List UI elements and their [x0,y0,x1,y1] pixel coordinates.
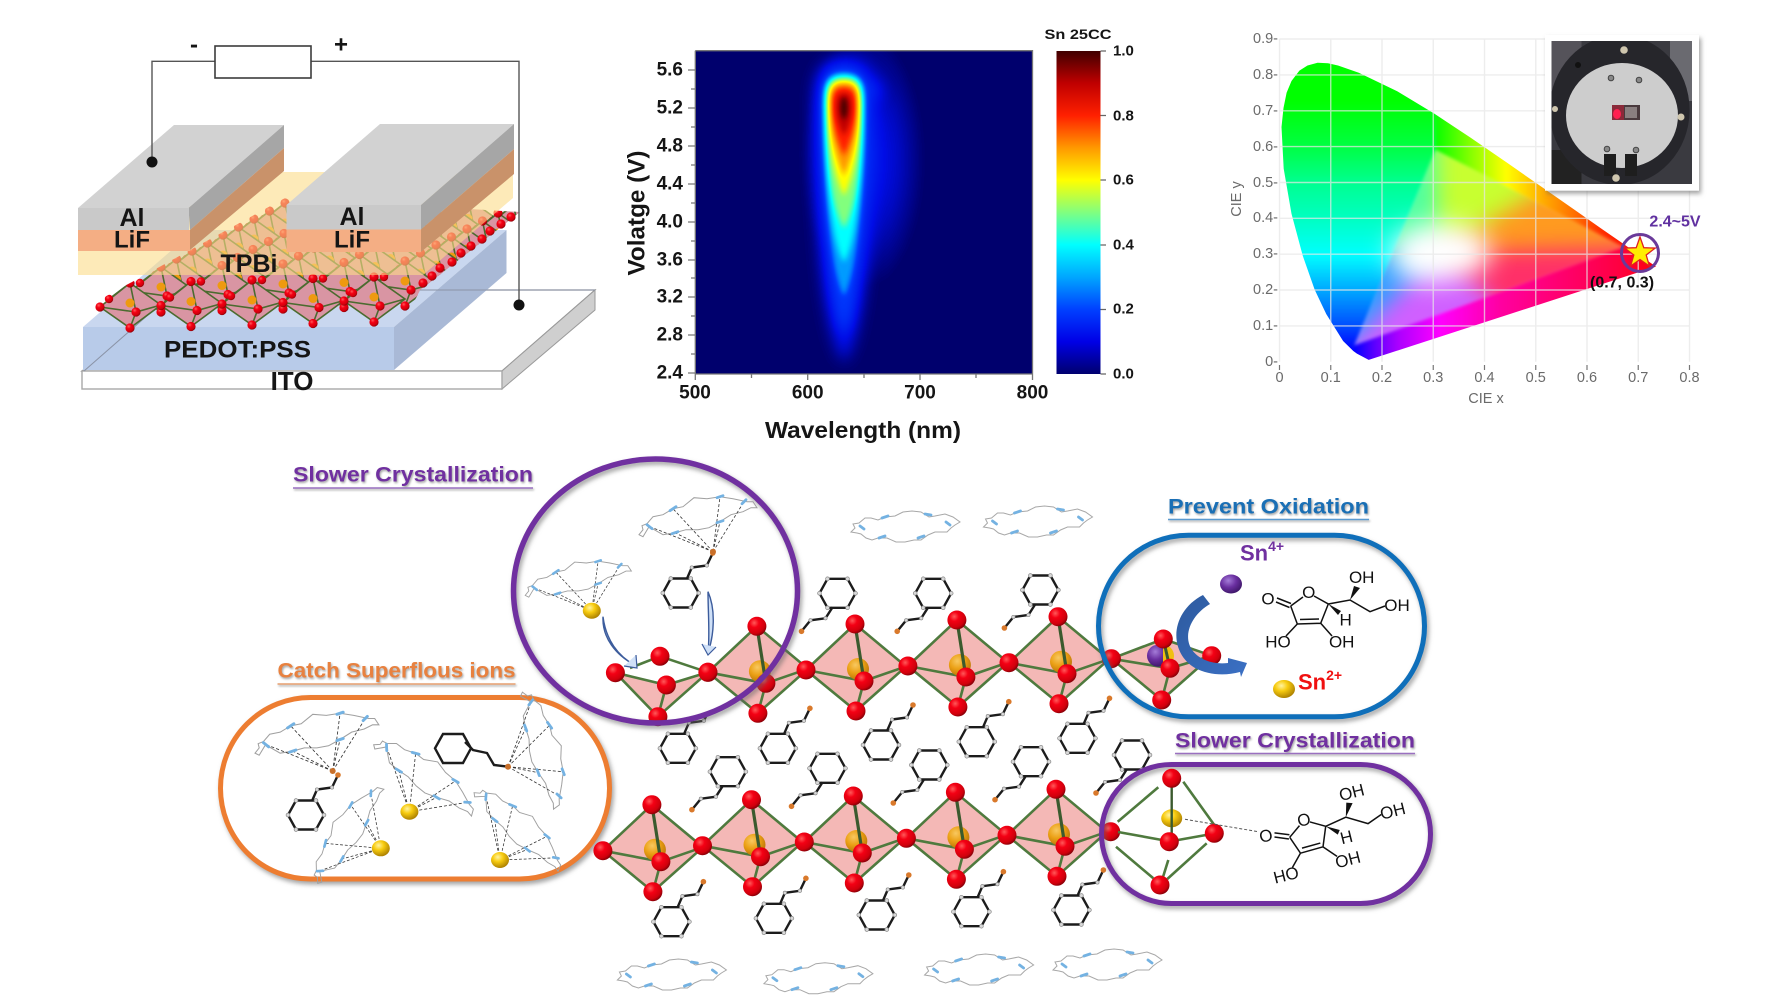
big purple circle outline [514,459,798,723]
voltage axis labels: 4.0 [657,212,683,232]
colour scale: 0.8 [1113,108,1134,124]
layer labels: LiF [334,226,370,254]
blue pill outline [1098,535,1424,717]
plot frame and ticks [688,51,1032,380]
x tick labels: 0.6 [1577,370,1597,386]
orange pill outline [220,698,610,879]
layer labels: ITO [271,366,313,396]
y tick labels: 0.8- [1253,67,1278,83]
voltage axis labels: 2.8 [657,324,683,346]
colour scale: 0.2 [1113,300,1134,318]
right Al and LiF electrode [286,124,514,252]
heading: prevent oxidation: Prevent Oxidation [1168,496,1369,518]
chart: EL intensity heatmap [624,26,1135,443]
ascorbic acid molecule bound: OH [1378,799,1407,824]
colour scale: 0.4 [1113,236,1135,254]
phenethylammonium cations [652,574,1152,938]
voltage axis labels: 5.2 [657,98,683,118]
ascorbic acid molecule bound: OH [1337,780,1366,805]
y tick labels: 0.9- [1253,31,1278,47]
colour scale: Sn 25CC [1044,26,1112,42]
ascorbic acid molecule bound [1252,772,1416,889]
perovskite chain bottom [593,780,1120,901]
purple pill white backdrop [1102,764,1430,904]
layer labels: PEDOT:PSS [164,336,311,364]
y axis title: Volatge (V) [624,151,650,275]
colour scale: 0.6 [1113,172,1134,188]
y tick labels: 0.1- [1253,318,1278,334]
x tick labels: 0.1 [1321,370,1341,386]
x tick labels: 0 [1275,370,1284,386]
chain unit at oxidation site [1102,630,1221,710]
x tick labels: 0.8 [1679,370,1700,386]
panel: catch superfluous ions [220,691,610,895]
perovskite chain top [606,607,1221,726]
Sn2+ ion [1273,680,1295,698]
voltage axis labels [657,60,683,384]
chart: CIE chromaticity diagram [1229,30,1701,407]
colour scale [1044,26,1135,382]
x tick marks [1280,365,1690,370]
Sn4+ label: Sn [1240,540,1268,566]
layer labels [114,203,370,396]
panel: device schematic [78,32,595,396]
CIE coordinate marker star [1622,234,1658,272]
ascorbic acid molecule: H [1340,610,1352,630]
y tick labels [1253,31,1278,370]
circuit wiring and resistor [146,32,524,310]
layer labels: Al [340,203,364,231]
voltage axis labels: 3.2 [657,286,683,308]
ascorbic acid molecule bound: OH [1333,848,1363,872]
ascorbic acid molecule [1261,568,1410,652]
Sn4+ ion [1220,574,1242,594]
voltage axis labels: 3.6 [657,250,683,270]
ascorbic acid molecule: O [1261,590,1275,608]
ascorbic acid molecule: OH [1384,596,1410,615]
ascorbic acid molecule bound: HO [1271,863,1301,888]
heading: slower crystallization top: Slower Crystallization [293,464,533,486]
inset photo of device [1545,35,1699,191]
ascorbic acid molecule: O [1302,583,1315,602]
purple pill outline [1102,764,1430,904]
colour scale: 1.0 [1113,42,1134,60]
colour horseshoe [1282,62,1656,360]
panel: prevent oxidation [1098,535,1424,717]
ascorbic acid molecule bound: H [1338,827,1355,848]
Sn2+ label: Sn [1298,670,1326,694]
wavelength axis labels [679,382,1048,404]
Sn2+ label: 2+ [1326,667,1342,683]
voltage axis labels: 4.4 [657,174,683,194]
x tick labels: 0.7 [1628,370,1648,386]
colour scale: 0.0 [1113,366,1134,382]
x tick labels: 0.4 [1474,370,1495,386]
curved reduction arrow [1176,595,1247,677]
left Al and LiF electrode [78,125,284,251]
Sn4+ label: 4+ [1268,538,1284,554]
x tick labels [1275,370,1700,386]
layer labels: TPBi [221,250,277,278]
circuit wiring and resistor: + [334,32,348,58]
y tick labels: 0.6- [1253,139,1278,155]
grid lines [1280,39,1690,362]
voltage axis labels: 5.6 [657,60,683,80]
wavelength axis labels: 600 [792,382,824,404]
y tick labels: 0.5- [1253,175,1278,191]
heading: slower crystallization right: Slower Crystallization [1175,730,1415,752]
ITO substrate [82,290,595,389]
y tick labels: 0- [1265,354,1278,370]
x tick labels: 0.2 [1372,370,1392,386]
ascorbic acid molecule bound: O [1295,809,1313,831]
chain unit at crystallization site [606,647,717,726]
arrow: ion to lattice [603,617,637,668]
voltage axis labels: 2.4 [657,362,683,384]
panel: slower crystallization circle contents [525,496,757,668]
heatmap field [695,50,1032,374]
PEDOT:PSS layer [83,230,595,371]
layer labels: LiF [114,226,150,254]
voltage range label: 2.4~5V [1649,214,1701,230]
perovskite layer in device [95,194,545,333]
CIE x axis title: CIE x [1468,391,1504,407]
expanded octahedron with bonding [1116,769,1224,894]
wavelength axis labels: 800 [1017,382,1048,404]
crown ether molecules background rows [617,506,1162,994]
x tick labels: 0.3 [1423,370,1443,386]
wavelength axis labels: 700 [904,382,936,404]
ascorbic acid molecule: OH [1349,568,1374,587]
big circle white backdrop [514,459,798,723]
TPBi translucent layer [78,172,513,275]
x axis title: Wavelength (nm) [765,417,961,443]
y tick labels: 0.4- [1253,210,1278,226]
y tick labels: 0.7- [1253,103,1278,119]
coordinate label: (0.7, 0.3) [1590,274,1654,292]
ascorbic acid molecule bound: O [1257,825,1275,847]
arrow: cation to lattice [702,592,716,655]
y tick labels: 0.3- [1253,246,1278,262]
wavelength axis labels: 500 [679,382,711,404]
layer labels: Al [120,204,144,232]
CIE y axis title: CIE y [1229,181,1245,217]
y tick labels: 0.2- [1253,282,1278,298]
ascorbic acid molecule: OH [1329,632,1354,652]
heading: catch superflous ions: Catch Superflous ions [278,660,516,682]
perovskite edge balls [418,212,516,288]
crown complexes with ions [255,691,567,895]
voltage axis labels: 4.8 [657,136,683,156]
panel: slower crystallization pill [1102,764,1430,904]
ascorbic acid molecule: HO [1265,632,1291,652]
x tick labels: 0.5 [1526,370,1546,386]
circuit wiring and resistor: - [190,32,198,58]
hydrogen bond dashed line [1185,819,1258,832]
